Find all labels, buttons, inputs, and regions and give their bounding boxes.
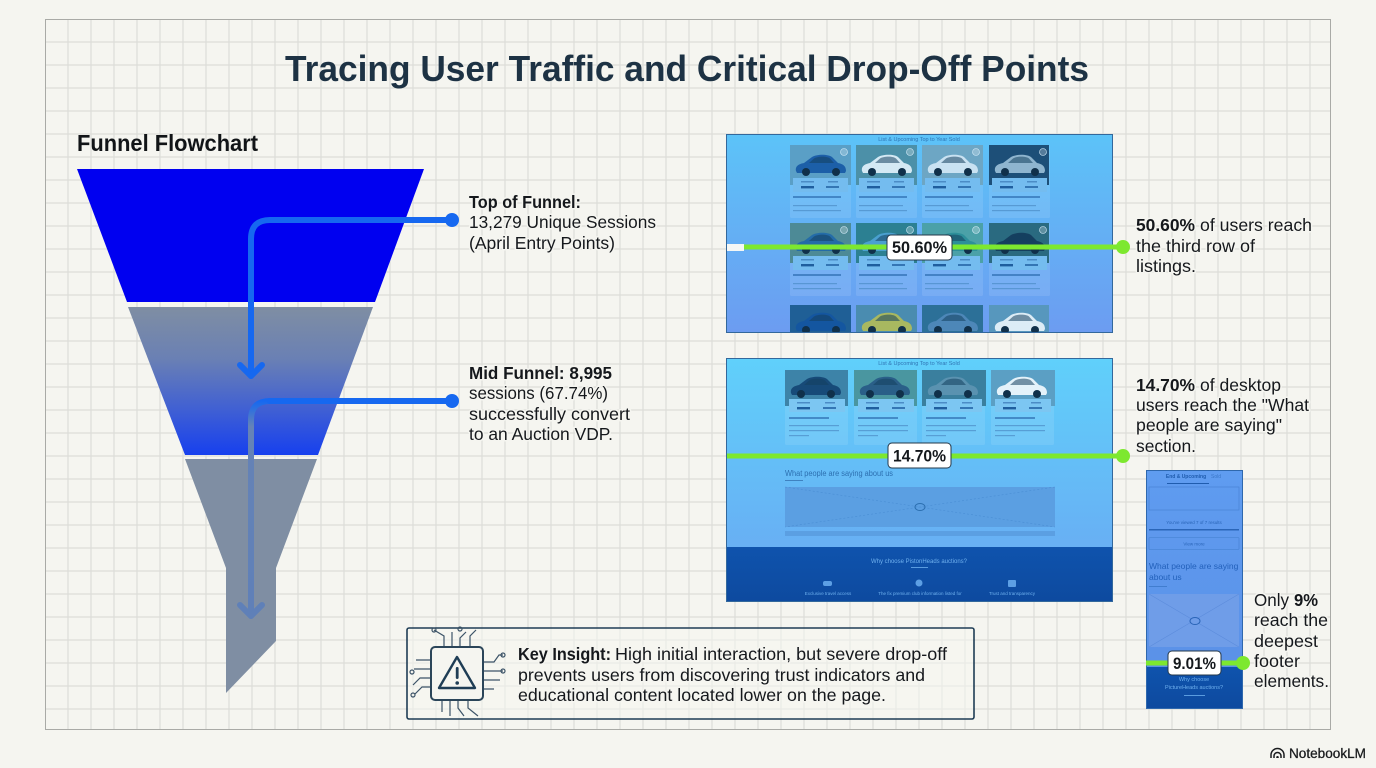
text: mid funnel: sessions (67.74%) — [469, 383, 608, 403]
screenshot: mobile footer 9.01%: PictureHeads auctions? — [1165, 685, 1223, 691]
text: 50.60% callout: 50.60% — [1136, 215, 1195, 235]
text: 14.70% callout: of desktop — [1200, 375, 1281, 395]
text: 9% callout: reach the — [1254, 610, 1328, 630]
marker: 9.01% scroll line — [1146, 651, 1250, 675]
funnel: bottom stage — [185, 459, 317, 693]
text: 14.70% callout: users reach the "What — [1136, 395, 1309, 415]
text: 9% callout — [1254, 590, 1329, 691]
arrow: top of funnel — [240, 213, 459, 376]
text: mid funnel: Mid Funnel: 8,995 — [469, 363, 612, 383]
icon: warning chip — [410, 627, 505, 716]
text: key insight: prevents users from discovering trust indicators and — [518, 665, 925, 685]
text: 14.70% callout: section. — [1136, 436, 1196, 456]
badge: 14.70%: 14.70% — [893, 448, 946, 466]
funnel chart — [77, 169, 424, 693]
text: 50.60% callout — [1136, 215, 1312, 276]
text: mid funnel — [469, 363, 630, 444]
logo: NotebookLM: NotebookLM — [1289, 745, 1366, 761]
screenshot: mobile footer 9.01%: View more — [1183, 542, 1205, 546]
screenshot: desktop listings 50.60% — [726, 134, 1112, 335]
screenshot: desktop testimonials 14.70%: Trust and transparency — [989, 591, 1036, 596]
text: top of funnel: 13,279 Unique Sessions — [469, 212, 656, 232]
screenshot: desktop testimonials 14.70%: What people are saying about us — [785, 469, 893, 478]
text: 50.60% callout: listings. — [1136, 256, 1196, 276]
text: top of funnel: Top of Funnel: — [469, 192, 581, 212]
marker: 14.70% scroll line — [727, 443, 1130, 468]
text: 9% callout: elements. — [1254, 671, 1329, 691]
text: 50.60% callout: the third row of — [1136, 236, 1255, 256]
badge: 50.60% — [887, 235, 952, 260]
text: 9% callout: deepest — [1254, 631, 1318, 651]
screenshot: desktop testimonials 14.70%: List & Upcoming Top to Year Sold — [878, 361, 960, 367]
text: key insight: educational content located lower on the page. — [518, 685, 886, 705]
marker: 50.60% scroll line — [744, 235, 1130, 260]
text: top of funnel: (April Entry Points) — [469, 233, 615, 253]
screenshot: mobile footer 9.01% — [1146, 470, 1242, 708]
title: Tracing User Traffic and Critical Drop-Off Points — [285, 48, 1089, 89]
text: 14.70% callout — [1136, 375, 1309, 456]
callout: key insight — [407, 627, 974, 719]
screenshot: mobile footer 9.01%: You've viewed 7 of 7 results — [1166, 520, 1222, 525]
heading: funnel flowchart: Funnel Flowchart — [77, 130, 258, 156]
badge: 14.70% — [888, 443, 951, 468]
funnel: top stage — [77, 169, 424, 302]
text: key insight: High initial interaction, but severe drop-off — [615, 644, 947, 664]
badge: 50.60%: 50.60% — [892, 239, 947, 257]
text: 9% callout: 9% — [1294, 590, 1318, 610]
screenshot: desktop listings 50.60%: List & Upcoming Top to Year Sold — [878, 137, 960, 143]
screenshot: mobile footer 9.01%: What people are saying — [1149, 561, 1239, 571]
badge: 9.01%: 9.01% — [1173, 655, 1216, 673]
text: key insight: Key Insight: — [518, 644, 611, 664]
arrow: mid funnel — [240, 394, 459, 616]
screenshot: desktop testimonials 14.70%: The fix premium club information listed for — [878, 591, 962, 596]
screenshot: mobile footer 9.01%: about us — [1149, 572, 1182, 582]
text: key insight — [518, 644, 947, 705]
screenshot: desktop testimonials 14.70%: Why choose PistonHeads auctions? — [871, 559, 968, 565]
funnel: mid stage — [128, 307, 373, 455]
text: mid funnel: to an Auction VDP. — [469, 424, 613, 444]
screenshot: desktop testimonials 14.70%: Exclusive travel access — [805, 591, 852, 596]
text: 9% callout: Only — [1254, 590, 1289, 610]
text: 14.70% callout: 14.70% — [1136, 375, 1195, 395]
text: 9% callout: footer — [1254, 651, 1300, 671]
text: top of funnel — [469, 192, 656, 253]
screenshot: desktop testimonials 14.70% — [726, 358, 1112, 602]
text: 14.70% callout: people are saying" — [1136, 415, 1282, 435]
screenshot: mobile footer 9.01%: Why choose — [1179, 677, 1209, 683]
text: mid funnel: successfully convert — [469, 404, 630, 424]
text: 50.60% callout: of users reach — [1200, 215, 1312, 235]
screenshot: mobile footer 9.01%: End & Upcoming — [1166, 474, 1206, 480]
screenshot: mobile footer 9.01%: Sold — [1211, 474, 1221, 480]
